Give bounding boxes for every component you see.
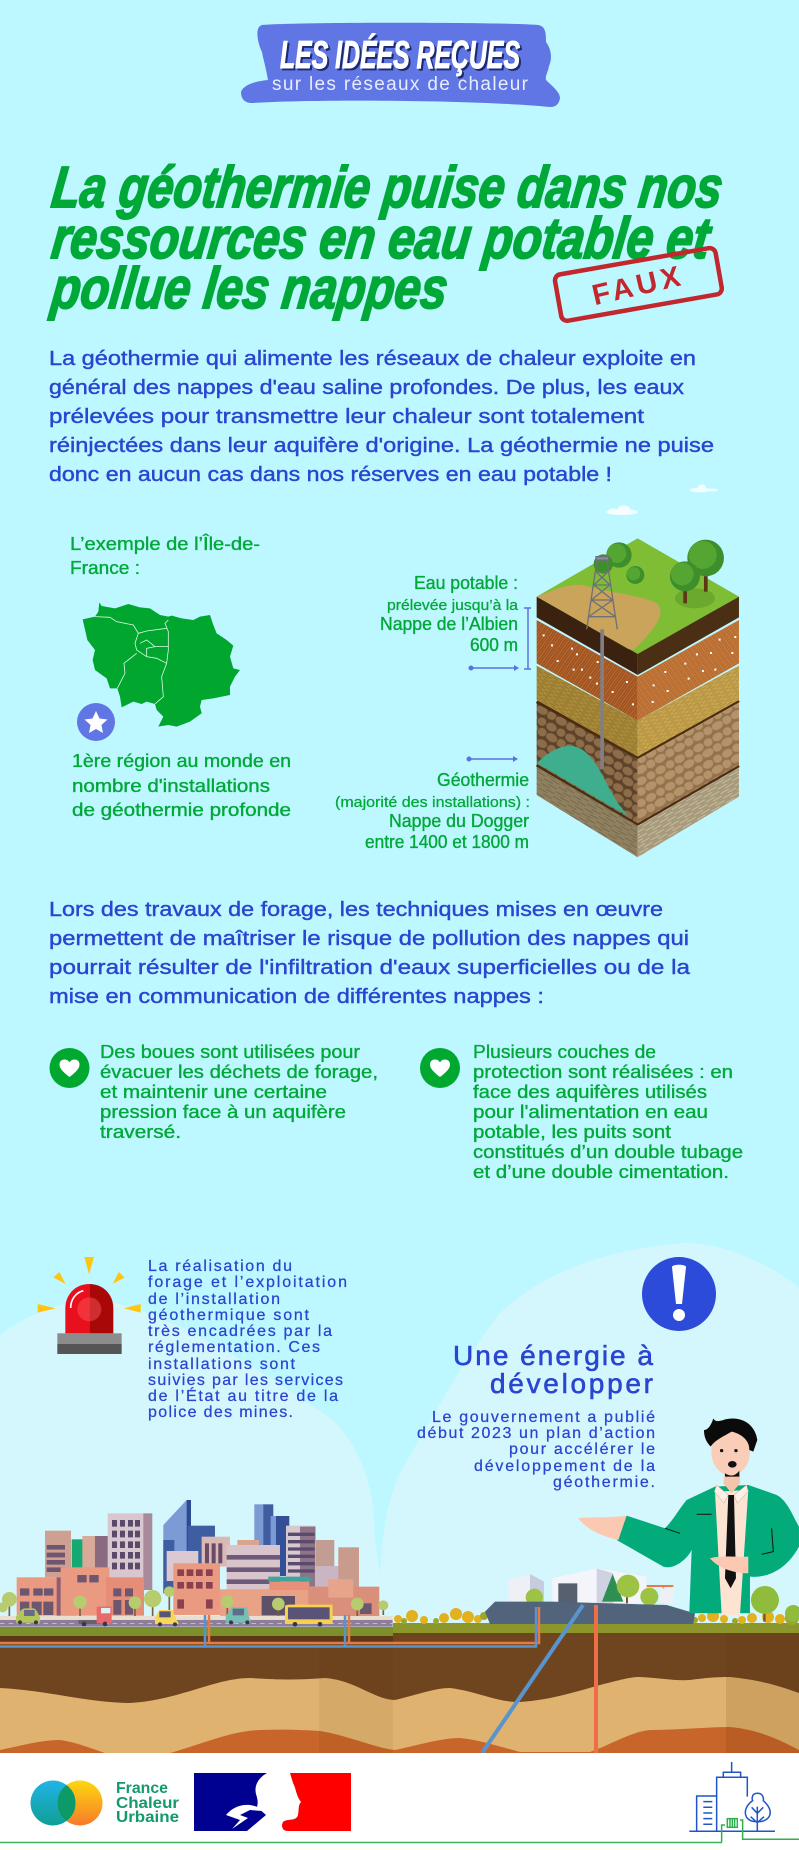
layer: orange earth — [537, 620, 739, 721]
text: couches de protection: pour l'alimentation en eau — [473, 1102, 708, 1122]
text: boues: et maintenir une certaine — [100, 1082, 327, 1102]
icon: heart right — [420, 1048, 460, 1088]
text: réglementation: très encadrées par la — [148, 1323, 332, 1340]
hand on chest — [710, 1556, 748, 1573]
bushes — [394, 1608, 799, 1625]
text: boues: traversé. — [100, 1122, 181, 1142]
drilling tower — [587, 557, 617, 629]
labels: eau potable: 600 m — [470, 635, 518, 655]
text: plan d'action: développement de la — [474, 1458, 655, 1475]
text: réglementation: réglementation. Ces — [148, 1339, 320, 1356]
heading: une énergie à développer: développer — [490, 1368, 653, 1399]
intro paragraph: prélevées pour transmettre leur chaleur sont totalement — [49, 406, 645, 428]
stratum: sand — [0, 1677, 799, 1753]
aquifer: Dogger — [537, 746, 633, 818]
text: 1ère région: 1ère région au monde en — [72, 751, 291, 771]
text: boues: pression face à un aquifère — [100, 1102, 346, 1122]
map of Île-de-France — [83, 602, 240, 727]
hair — [704, 1418, 757, 1452]
layer: cobbles — [537, 701, 739, 823]
stratum: brown soil — [0, 1627, 799, 1753]
shading: right section — [726, 1627, 799, 1753]
ground: grass top — [537, 538, 739, 654]
icon: star — [77, 703, 115, 741]
banner title: LES IDÉES REÇUES — [280, 33, 520, 77]
footer — [0, 1753, 799, 1850]
collar — [714, 1485, 748, 1503]
geothermal plant — [485, 1568, 695, 1624]
text: boues — [100, 1042, 378, 1142]
text: plan d'action: début 2023 un plan d’action — [417, 1425, 655, 1442]
heading: une énergie à développer: Une énergie à — [453, 1340, 653, 1371]
paragraph: travaux de forage: mise en communication de différentes nappes : — [49, 986, 544, 1008]
arrow: géothermie depth — [466, 756, 518, 762]
ground: sand patch — [537, 585, 660, 650]
arrow: eau potable depth — [468, 608, 531, 671]
labels: eau potable: Eau potable : — [414, 573, 518, 593]
city — [0, 1500, 393, 1627]
plant buildings — [508, 1568, 673, 1603]
stamp: FAUX: FAUX — [589, 260, 687, 312]
grass: left — [0, 1627, 393, 1636]
labels: géothermie — [335, 770, 530, 852]
jacket — [617, 1485, 799, 1613]
labels: géothermie: Nappe du Dogger — [389, 811, 529, 831]
flag blue — [194, 1773, 267, 1831]
heading: exemple: L’exemple de l’Île-de- — [70, 534, 260, 554]
text: couches de protection: constitués d’un double tubage — [473, 1142, 743, 1162]
background buildings — [45, 1500, 359, 1593]
underground strata — [0, 1623, 799, 1753]
text: plan d'action: géothermie. — [553, 1474, 655, 1491]
plant trees — [526, 1574, 658, 1606]
text: plan d'action: pour accélérer le — [509, 1441, 655, 1458]
layer: yellow sediment — [537, 666, 739, 757]
grass: right — [393, 1623, 799, 1633]
text: réglementation: suivies par les services — [148, 1372, 343, 1389]
street trees — [0, 1586, 388, 1617]
stratum: orange clay — [0, 1727, 799, 1753]
well pipe — [600, 629, 604, 769]
background blob: left — [0, 1300, 393, 1640]
banner title — [280, 33, 522, 79]
neck — [723, 1473, 740, 1493]
geothermal well: production — [594, 1605, 598, 1753]
logo circles — [30, 1780, 102, 1826]
icon: exclamation — [642, 1257, 716, 1331]
heading second line: France : — [70, 558, 140, 578]
labels: eau potable — [380, 573, 519, 655]
main title — [47, 155, 726, 321]
footer green line — [0, 1842, 722, 1844]
stamp: FAUX — [554, 247, 723, 322]
text: réglementation: géothermique sont — [148, 1307, 310, 1324]
text: réglementation — [148, 1258, 347, 1421]
paragraph: travaux de forage: pourrait résulter de l'infiltration d'eaux superficielles ou de la — [49, 957, 691, 979]
text: couches de protection: et d’une double cimentation. — [473, 1162, 729, 1182]
road — [0, 1616, 393, 1627]
text: couches de protection: Plusieurs couches de — [473, 1042, 656, 1062]
text: réglementation: de l’installation — [148, 1291, 280, 1308]
banner brush shape — [241, 23, 560, 107]
logo text: France — [116, 1780, 168, 1797]
icon: siren — [38, 1257, 141, 1354]
intro paragraph: La géothermie qui alimente les réseaux de chaleur exploite en — [49, 348, 696, 370]
intro paragraph: réinjectées dans leur aquifère d'origine. La géothermie ne puise — [49, 435, 714, 457]
text: 1ère région — [72, 751, 291, 820]
labels: géothermie: (majorité des installations) : — [335, 795, 530, 811]
logo: France Chaleur Urbaine — [30, 1780, 179, 1826]
text: réglementation: police des mines. — [148, 1404, 293, 1421]
logo text: Urbaine — [116, 1809, 179, 1826]
bush beside character — [751, 1586, 799, 1622]
background blob: right — [380, 1243, 799, 1640]
dark soil edge — [0, 1636, 393, 1642]
character presenting — [578, 1418, 799, 1615]
banner subtitle: sur les réseaux de chaleur — [272, 74, 529, 95]
cloud small — [690, 484, 718, 492]
intro paragraph: donc en aucun cas dans nos réserves en eau potable ! — [49, 464, 612, 486]
text: couches de protection — [473, 1042, 743, 1182]
glasses and mouth — [720, 1449, 738, 1468]
text: réglementation: La réalisation du — [148, 1258, 292, 1275]
labels: géothermie: Géothermie — [437, 770, 529, 790]
heading: une énergie à développer — [453, 1340, 653, 1399]
beard shadow — [725, 1471, 739, 1477]
layer: bottom rock — [537, 765, 739, 857]
hand pointing — [578, 1516, 627, 1540]
text: couches de protection: potable, les puits sont — [473, 1122, 671, 1142]
layer: dark topsoil — [537, 597, 739, 675]
text: réglementation: installations sont — [148, 1356, 296, 1373]
jacket details — [665, 1514, 773, 1554]
logo text — [116, 1780, 179, 1826]
banner title: LES IDÉES REÇUES — [282, 35, 522, 79]
shirt — [715, 1490, 748, 1615]
text: 1ère région: nombre d'installations — [72, 776, 270, 796]
text: boues: Des boues sont utilisées pour — [100, 1042, 360, 1062]
paragraph: travaux de forage: Lors des travaux de forage, les techniques mises en œuvre — [49, 899, 663, 921]
header banner — [241, 23, 560, 107]
paragraph: travaux de forage: permettent de maîtriser le risque de pollution des nappes qui — [49, 928, 689, 950]
vehicles — [16, 1605, 333, 1627]
tree — [594, 540, 724, 608]
text: plan d'action: Le gouvernement a publié — [432, 1409, 655, 1426]
geological block diagram — [537, 538, 739, 857]
text: 1ère région: de géothermie profonde — [72, 800, 291, 820]
panel: Île-de-France example — [70, 534, 291, 820]
flag red — [282, 1773, 351, 1831]
intro paragraph — [49, 348, 714, 486]
text: couches de protection: protection sont réalisées : en — [473, 1062, 733, 1082]
flag hand — [226, 1805, 262, 1829]
foreground buildings — [17, 1563, 379, 1616]
tie — [725, 1495, 736, 1588]
pipes — [0, 1607, 539, 1646]
shading: mid section — [319, 1627, 393, 1753]
paragraph: travaux de forage — [49, 899, 691, 1008]
intro paragraph: général des nappes d'eau saline profondes. De plus, les eaux — [49, 377, 684, 399]
head — [711, 1428, 750, 1476]
text: réglementation: de l’État au titre de la — [148, 1386, 338, 1405]
labels: eau potable: Nappe de l’Albien — [380, 614, 518, 634]
text: plan d'action — [417, 1409, 655, 1491]
rock base — [485, 1602, 695, 1624]
text: couches de protection: face des aquifères utilisés — [473, 1082, 707, 1102]
cloud above block — [606, 506, 638, 515]
logo text: Chaleur — [116, 1795, 179, 1812]
geothermal well: injection — [482, 1605, 583, 1753]
icon: heart left — [50, 1048, 90, 1088]
main title: pollue les nappes — [47, 256, 451, 321]
labels: eau potable: prélevée jusqu’à la — [387, 598, 519, 614]
labels: géothermie: entre 1400 et 1800 m — [365, 832, 529, 852]
text: boues: évacuer les déchets de forage, — [100, 1062, 378, 1082]
text: réglementation: forage et l’exploitation — [148, 1274, 347, 1291]
logo: République française — [194, 1773, 351, 1831]
icon: city footer — [689, 1762, 799, 1842]
